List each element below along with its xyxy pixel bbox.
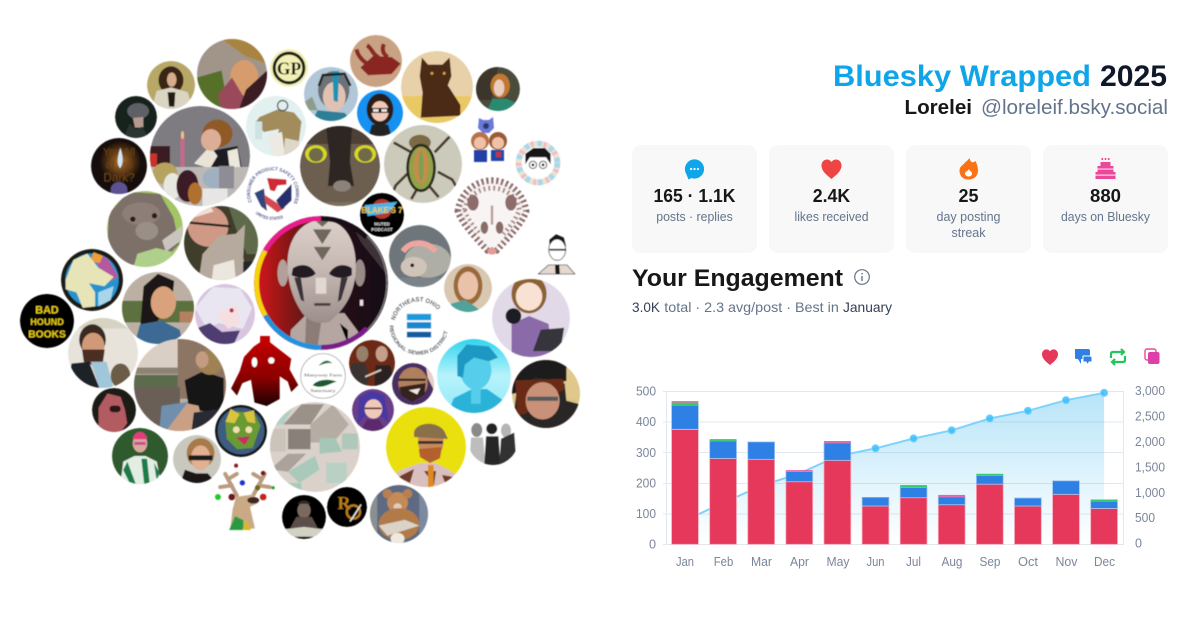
- left axis labels: 300: [636, 446, 656, 460]
- icon: quotes legend squares: [1145, 349, 1160, 364]
- left axis labels: 0: [649, 538, 656, 552]
- avatar: small blue bat: [478, 117, 494, 133]
- avatar: close-up cat with yellow eyes: [300, 126, 380, 206]
- avatar: Blake's 7 podcast: [360, 193, 404, 237]
- right axis labels: 0: [1135, 536, 1142, 550]
- avatar: blue illustrated man: [437, 339, 511, 413]
- avatar: quilt: [270, 402, 360, 492]
- avatar: pixel possum: [458, 181, 526, 255]
- month labels: Feb: [714, 555, 733, 569]
- right axis labels: 2,500: [1135, 410, 1165, 424]
- icon: likes legend heart: [1042, 349, 1058, 365]
- avatar: smiling woman outdoors: [122, 272, 194, 344]
- avatar: beetle drawing: [384, 125, 462, 203]
- icon: flame: [960, 158, 978, 180]
- panel: streak stat: day posting: [936, 209, 1000, 224]
- avatar: woman in wheelchair at window: [134, 339, 226, 431]
- right axis labels: 1,000: [1135, 486, 1165, 500]
- avatar: RS gears and quill: R: [337, 493, 352, 513]
- panel: days on Bluesky stat: [1043, 145, 1168, 253]
- avatar: painted brown cat: [401, 51, 473, 123]
- avatar: raptor with goggles: [246, 96, 306, 156]
- avatar: two cartoon kids: [471, 132, 507, 162]
- avatar: Blake's 7 podcast: PODCAST: [371, 227, 393, 232]
- avatar: Manyway Farm Sanctuary logo: Manyway Farm: [304, 373, 343, 378]
- month labels: Mar: [751, 555, 772, 569]
- chart legend icons: [1042, 349, 1160, 365]
- avatar: teddy bear reading: [370, 485, 428, 544]
- right axis labels: 500: [1135, 511, 1155, 525]
- avatar: Consumer Product Safety Commission seal: [246, 166, 300, 220]
- avatar: cartoon boy with rainbow ring: [515, 140, 561, 186]
- cumulative line: [685, 393, 1104, 520]
- avatar: candle in the dark: Dark?: [103, 171, 135, 184]
- right axis labels: 1,500: [1135, 460, 1165, 474]
- avatar: polar bear rainbow badge: [61, 249, 123, 311]
- panel: days on Bluesky stat: days on Bluesky: [1061, 209, 1150, 224]
- avatar: RS gears and quill: [327, 487, 367, 527]
- avatar: hedgehog with flower crown: [389, 225, 451, 287]
- month labels: Jun: [866, 555, 885, 569]
- avatar: Northeast Ohio Regional Sewer District logo: REGIONAL SEWER DISTRICT: [389, 324, 448, 356]
- avatar: Manyway Farm Sanctuary logo: Sanctuary: [310, 388, 337, 393]
- text: engagement summary: 3.0K: [632, 299, 661, 315]
- month labels: May: [826, 555, 850, 569]
- avatar: candle in the dark: [91, 138, 147, 198]
- heading: Your Engagement: Your Engagement: [632, 265, 843, 292]
- icon: chat bubble: [685, 159, 704, 180]
- avatar: Bad Hound Books: HOUND: [30, 317, 64, 327]
- left axis labels: 200: [636, 476, 656, 490]
- avatar: Northeast Ohio Regional Sewer District logo: NORTHEAST OHIO: [390, 296, 440, 320]
- avatar: two men on red: [349, 340, 395, 386]
- avatar: Bad Hound Books: BAD: [35, 304, 59, 316]
- panel: posts and replies stat: 165 · 1.1K: [654, 186, 736, 206]
- month labels: Nov: [1056, 555, 1078, 569]
- header: user name and handle: [904, 97, 1168, 119]
- left axis labels: 100: [636, 507, 656, 521]
- month labels: [676, 555, 1115, 569]
- avatar: red tentacles: [350, 35, 402, 87]
- avatar: Manyway Farm Sanctuary logo: [301, 354, 345, 398]
- chart: monthly engagement stacked bars with cumulative line: [636, 384, 1165, 569]
- icon: birthday cake: [1096, 158, 1116, 179]
- avatar: reading man: [282, 495, 326, 539]
- avatar: wombat: [107, 191, 183, 267]
- icon: heart: [822, 160, 842, 179]
- avatar: child at table: [150, 106, 250, 208]
- avatar: dark hat figure: [115, 96, 157, 138]
- panel: posts and replies stat: [632, 145, 757, 253]
- header: user name and handle: @loreleif.bsky.social: [981, 97, 1168, 119]
- avatar: man with cat: [184, 206, 258, 280]
- panel: likes stat: likes received: [794, 209, 868, 224]
- avatar: Bad Hound Books: BOOKS: [28, 330, 66, 341]
- right axis labels: [1135, 384, 1165, 550]
- avatar: memoji woman on blue: [357, 90, 403, 136]
- left axis labels: [636, 384, 656, 552]
- avatar: Northeast Ohio Regional Sewer District logo: [389, 296, 448, 356]
- text: engagement summary: January: [843, 299, 892, 315]
- avatar: Consumer Product Safety Commission seal: UNITED STATES: [255, 210, 284, 220]
- icon: replies legend bubbles: [1075, 349, 1092, 365]
- right axis labels: 3,000: [1135, 384, 1165, 398]
- stacked bars: replies: [672, 405, 1118, 508]
- stacked bars: reposts: [672, 403, 1118, 501]
- avatar: blonde woman: [444, 264, 492, 312]
- avatar: laughing bald man: [392, 363, 434, 405]
- panel: streak stat: 25: [958, 186, 978, 206]
- panel: likes stat: [769, 145, 894, 253]
- avatar: bearded man with owl: [68, 318, 138, 388]
- avatar: man with flat cap on yellow: [386, 407, 466, 487]
- text: engagement summary: total · 2.3 avg/post · Best in: [664, 299, 839, 315]
- avatar: white-haired anime character: [195, 284, 255, 344]
- right axis labels: 2,000: [1135, 435, 1165, 449]
- panel: likes stat: 2.4K: [813, 186, 850, 206]
- stacked bars: quotes: [672, 401, 965, 497]
- header: title: Bluesky Wrapped: [833, 60, 1091, 93]
- stacked bars: likes: [672, 430, 1118, 544]
- avatar: main profile portrait with rainbow ring: [228, 190, 414, 376]
- icon: info: [855, 270, 869, 284]
- month labels: Apr: [790, 555, 809, 569]
- text: engagement summary: [632, 299, 892, 315]
- avatar: Blake's 7 podcast: BLAKE'S 7: [362, 206, 403, 215]
- panel: posts and replies stat: posts · replies: [656, 209, 733, 224]
- icon: reposts legend arrows: [1111, 349, 1125, 365]
- avatar: GP seal: GP: [277, 58, 301, 78]
- header: title: 2025: [1100, 60, 1167, 93]
- avatar: Consumer Product Safety Commission seal: CONSUMER PRODUCT SAFETY COMMISSION: [246, 166, 300, 204]
- avatar: reindeer with ornaments: [215, 464, 275, 530]
- month labels: Jan: [676, 555, 694, 569]
- month labels: Dec: [1094, 555, 1115, 569]
- avatar: green dragon character: [215, 405, 267, 457]
- header: user name and handle: Lorelei: [904, 97, 972, 119]
- avatar: man in hat: [197, 39, 267, 109]
- avatar: woman with glasses: [173, 435, 221, 483]
- avatar: line-art man: [538, 234, 575, 274]
- panel: streak stat: streak: [952, 225, 986, 240]
- avatar: illustrated woman with laptop and cat: [492, 274, 570, 357]
- left axis labels: 400: [636, 415, 656, 429]
- avatar: long-haired woman: [147, 61, 195, 109]
- avatar: Bad Hound Books: [20, 294, 74, 348]
- left axis labels: 500: [636, 384, 656, 398]
- cumulative points: [872, 389, 1108, 452]
- panel: streak stat: [906, 145, 1031, 253]
- avatar: GP seal: [270, 49, 308, 87]
- avatar: elf woman: [476, 67, 520, 111]
- avatar: candle in the dark: You All: [103, 146, 135, 158]
- avatar: red robot silhouette: [231, 336, 298, 406]
- month labels: Sep: [980, 555, 1001, 569]
- avatar: candle in the dark: of the: [106, 159, 132, 171]
- avatar: Blake's 7 podcast: MUTED: [374, 222, 390, 227]
- avatar: black and white group: [470, 422, 516, 466]
- cumulative area: [685, 393, 1104, 544]
- panel: days on Bluesky stat: 880: [1090, 186, 1121, 206]
- avatar: woman in green print: [112, 428, 168, 484]
- panel: avatar bubble cluster: [19, 34, 581, 544]
- month labels: Jul: [906, 555, 921, 569]
- avatar: purple-haired girl: [352, 389, 394, 431]
- avatar: woman with blue streaks: [304, 67, 358, 121]
- avatar: woman with spiky headband: [512, 360, 580, 428]
- month labels: Aug: [942, 555, 963, 569]
- month labels: Oct: [1018, 555, 1039, 569]
- avatar: red devil face: [92, 388, 136, 432]
